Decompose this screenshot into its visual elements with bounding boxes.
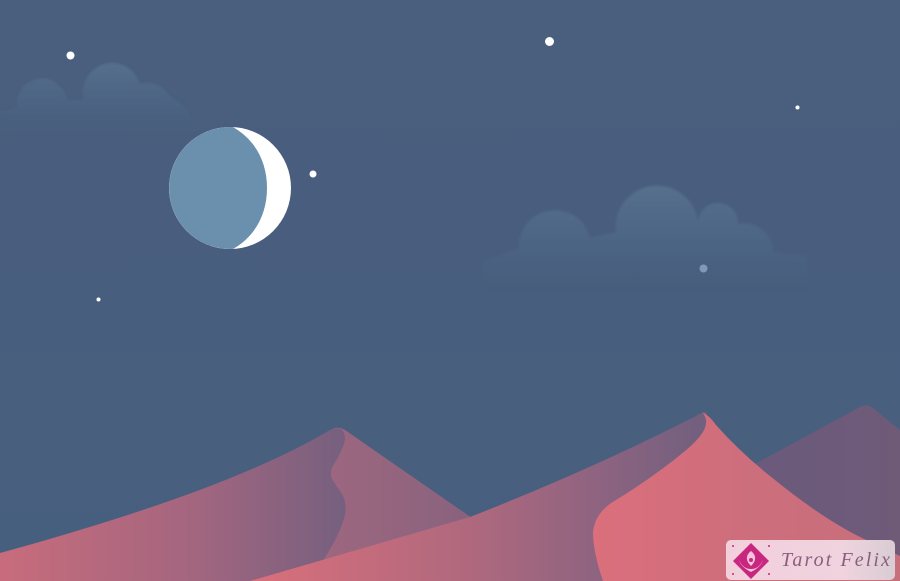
- dune: front: [250, 412, 900, 581]
- dune: far right: [740, 405, 900, 581]
- moon: shadowed disc: [169, 127, 267, 249]
- dune: left sunlit face: [280, 428, 472, 581]
- moon: [169, 127, 291, 249]
- dune: front sunlit face: [593, 412, 900, 581]
- dune: left: [0, 428, 472, 581]
- cloud: right: [484, 186, 808, 292]
- logo: diamond emblem: [732, 543, 770, 579]
- moon: lit crescent: [169, 127, 291, 249]
- watermark logo: Tarot Felix: [726, 540, 895, 580]
- dune: left shaded face: [0, 428, 346, 581]
- dune: front shaded face: [250, 412, 720, 581]
- stars: [66, 37, 800, 302]
- cloud: upper left: [0, 63, 200, 135]
- logo: wordmark: Tarot Felix: [781, 549, 892, 571]
- logo: badge background: [726, 540, 895, 580]
